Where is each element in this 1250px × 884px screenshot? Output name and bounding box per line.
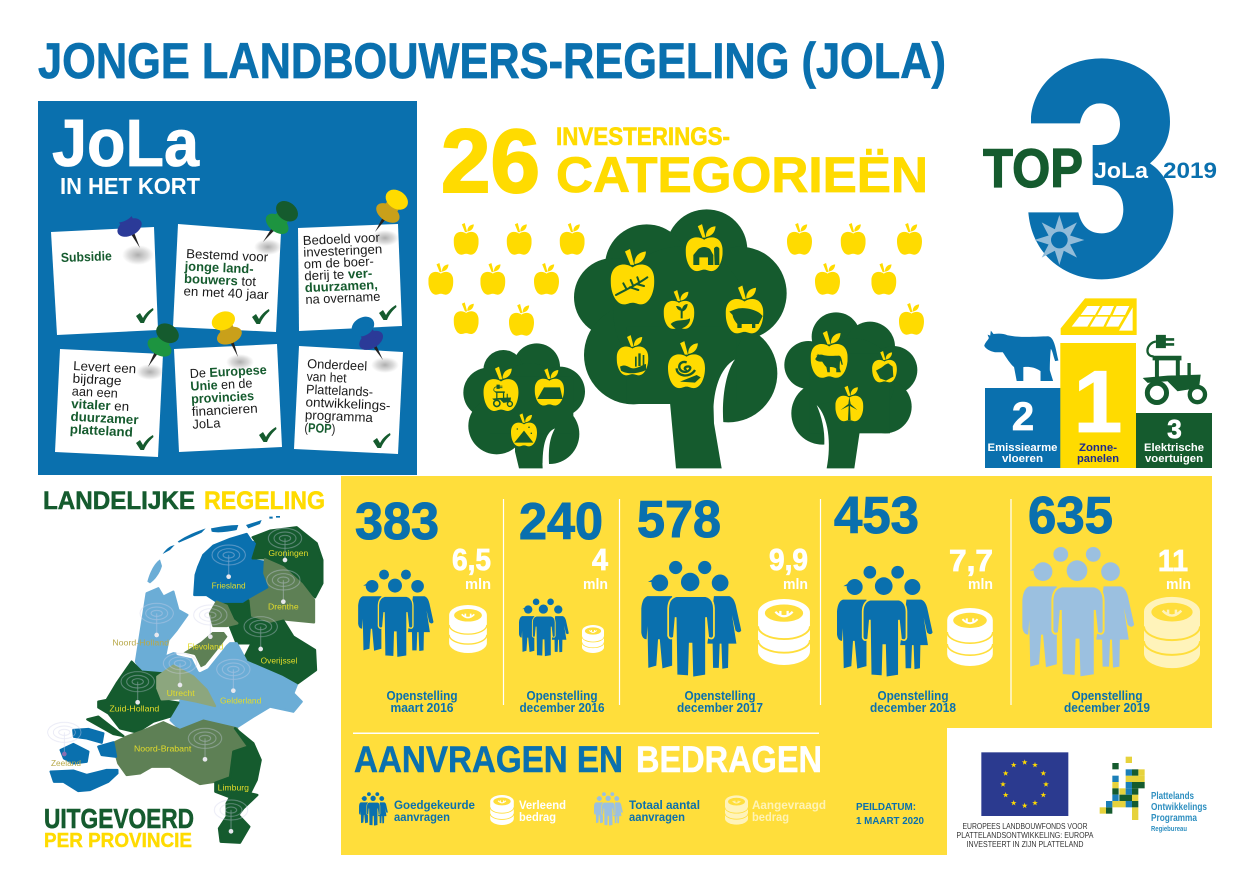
heading: aanvragen en bedragen <box>354 739 822 780</box>
heading: aanvragen en bedragen: BEDRAGEN <box>636 739 822 780</box>
icon: rose and carrot <box>677 362 701 383</box>
Noordoostpolder <box>210 602 237 626</box>
province labels: Overijssel <box>261 656 297 666</box>
note: vitaler platteland: aan een <box>72 383 118 401</box>
icon: pig <box>729 308 763 328</box>
large numeral 3 <box>1028 58 1173 279</box>
top 3 graphic <box>983 58 1217 468</box>
note: verduurzamen: duurzamen, <box>305 277 378 295</box>
icon: sun <box>1034 215 1084 265</box>
stat: december 2017 <box>637 491 810 715</box>
note: Europese Unie: Unie en de <box>190 375 253 394</box>
icon: barn <box>693 247 719 265</box>
note: vitaler platteland: Levert een <box>73 358 137 376</box>
Wadden islands <box>163 516 280 554</box>
legend: goedgekeurde aanvragen: aanvragen <box>394 812 450 824</box>
small left tree <box>463 343 585 468</box>
stat: december 2018 <box>834 487 993 715</box>
loose yellow apples <box>428 223 924 336</box>
icon: chicken <box>876 363 893 381</box>
stat: maart 2016: 6,5 <box>452 542 491 577</box>
label: JoLa: JoLa <box>1094 158 1149 183</box>
note: vitaler platteland <box>55 349 164 457</box>
podium step 1: panelen <box>1077 453 1119 465</box>
legend: goedgekeurde aanvragen <box>359 792 475 826</box>
Utrecht <box>157 666 215 706</box>
stat: december 2017: 578 <box>637 491 721 549</box>
heading: 26 investeringscategorieen <box>441 112 928 212</box>
legend: verleend bedrag <box>490 795 566 825</box>
stat: december 2018: mln <box>968 576 993 593</box>
Flevoland <box>178 630 230 670</box>
note: verduurzamen <box>298 224 402 331</box>
province labels: Limburg <box>218 783 249 793</box>
stat: december 2016 <box>519 493 609 715</box>
note: POP: Plattelands- <box>306 382 373 399</box>
logo: Plattelands Ontwikkelings Programma: Plattelands <box>1151 790 1194 802</box>
label: 2019: 2019 <box>1163 158 1217 183</box>
heading: JoLa: JoLa <box>52 106 200 181</box>
podium <box>984 298 1212 468</box>
stat: maart 2016: mln <box>465 576 491 593</box>
heading: 26 investeringscategorieen: INVESTERINGS- <box>556 123 730 151</box>
legend: totaal aantal aanvragen: aanvragen <box>629 812 685 824</box>
stat: december 2017: december 2017 <box>677 701 763 715</box>
illustration: apples and trees <box>428 209 924 470</box>
note: POP <box>294 346 403 454</box>
note: Europese Unie: De Europese <box>189 362 267 381</box>
large tree <box>574 209 787 468</box>
note: subsidie: Subsidie <box>61 248 112 265</box>
province labels: Groningen <box>268 548 309 558</box>
province labels: Zuid-Holland <box>109 703 160 713</box>
panel: JoLa in het kort <box>38 101 417 475</box>
icon: wheat <box>616 277 647 295</box>
stat: december 2019: 635 <box>1028 487 1113 545</box>
province labels: Flevoland <box>187 641 223 651</box>
panel: aanvragen en bedragen <box>341 476 1212 855</box>
title: JONGE LANDBOUWERS-REGELING (JOLA) <box>38 33 946 89</box>
stat: december 2018: 7,7 <box>949 543 993 578</box>
note: POP: (POP) <box>304 420 336 436</box>
note: verduurzamen: om de boer- <box>304 254 374 272</box>
heading: 26 investeringscategorieen: 26 <box>441 112 540 212</box>
heading: aanvragen en bedragen: AANVRAGEN EN <box>354 739 623 780</box>
stat: december 2019: december 2019 <box>1064 701 1150 715</box>
stat: december 2019: 11 <box>1158 543 1188 578</box>
province labels: Friesland <box>212 581 246 591</box>
stat: december 2019 <box>1022 487 1200 715</box>
stat: maart 2016: 383 <box>355 493 439 551</box>
heading: uitgevoerd per provincie: PER PROVINCIE <box>44 830 192 852</box>
stat: december 2018: Openstelling <box>878 689 948 703</box>
stat: december 2018: december 2018 <box>870 701 956 715</box>
note: POP: programma <box>305 407 374 425</box>
note: Europese Unie: provincies <box>191 388 254 406</box>
province labels: Gelderland <box>220 695 262 705</box>
logo: EU flag and caption <box>956 752 1094 849</box>
icon: wind turbine <box>841 397 857 420</box>
note: jonge landbouwers: jonge land- <box>183 258 254 276</box>
right tree <box>784 312 917 470</box>
Noord-Brabant <box>113 721 247 784</box>
icon: green pin 2 <box>137 319 183 374</box>
icon: tractor <box>492 385 512 407</box>
legend <box>359 792 826 826</box>
icon: cow on podium <box>984 331 1058 381</box>
stat: december 2016: 4 <box>592 542 609 577</box>
stat: december 2018: 453 <box>834 487 919 545</box>
legend: aangevraagd bedrag: bedrag <box>752 812 789 824</box>
icon: cow <box>815 354 843 372</box>
podium step 2: 2 <box>1012 395 1034 439</box>
ripples and markers <box>48 528 302 832</box>
heading: landelijke regeling <box>43 487 325 515</box>
note: vitaler platteland: vitaler en <box>71 396 130 414</box>
heading: landelijke regeling: LANDELIJKE <box>43 487 195 515</box>
note: Europese Unie: JoLa <box>192 415 222 432</box>
Texel <box>147 559 162 583</box>
note: jonge landbouwers <box>173 224 282 332</box>
legend: verleend bedrag: Verleend <box>519 800 566 812</box>
logo: Plattelands Ontwikkelings Programma: Programma <box>1151 812 1197 824</box>
stat: december 2019: mln <box>1166 576 1191 593</box>
podium step 3: 3 <box>1167 414 1182 444</box>
note: jonge landbouwers: bouwers tot <box>184 271 257 289</box>
podium step 3 <box>1136 413 1212 468</box>
podium step 1: Zonne- <box>1079 442 1117 454</box>
stat: december 2017: mln <box>783 576 808 593</box>
note: vitaler platteland: bijdrage <box>72 371 122 388</box>
legend: goedgekeurde aanvragen: Goedgekeurde <box>394 800 475 812</box>
Zeeland <box>51 729 117 791</box>
stat: december 2019: Openstelling <box>1072 689 1142 703</box>
stat: maart 2016: maart 2016 <box>390 701 454 715</box>
Gelderland <box>171 643 302 729</box>
stat: december 2016: 240 <box>519 493 603 551</box>
peildatum <box>856 802 924 827</box>
icon: yellow pin 1 <box>364 185 413 239</box>
logo: Plattelands Ontwikkelings Programma <box>1100 757 1207 833</box>
icon: green pin 1 <box>253 196 303 250</box>
stat: december 2016: mln <box>583 576 608 593</box>
peildatum: 1 MAART 2020 <box>856 816 924 827</box>
podium step 1 <box>1060 343 1136 468</box>
Friesland <box>194 534 269 603</box>
label: TOP: TOP <box>983 137 1083 199</box>
stat: maart 2016: Openstelling <box>386 689 458 703</box>
heading: uitgevoerd per provincie: UITGEVOERD <box>44 803 194 834</box>
icon: solar panel on podium <box>1061 298 1137 335</box>
note: POP: van het <box>306 369 347 386</box>
logo: EU flag and caption: INVESTEERT IN ZIJN PLATTELAND <box>966 840 1084 849</box>
province labels: Utrecht <box>167 688 195 698</box>
note: jonge landbouwers: Bestemd voor <box>186 246 269 265</box>
note: verduurzamen: na overname <box>305 289 381 307</box>
legend: aangevraagd bedrag: Aangevraagd <box>752 800 826 812</box>
podium step 2: Emissiearme <box>988 442 1058 454</box>
province labels: Noord-Brabant <box>134 743 192 753</box>
Drenthe <box>249 559 314 623</box>
logo: Plattelands Ontwikkelings Programma: Regiebureau <box>1151 824 1187 833</box>
Noord-Holland <box>136 588 200 677</box>
icon: blue pin 1 <box>108 202 152 254</box>
icon: hand with sprout <box>671 304 690 329</box>
province labels: Zeeland <box>51 758 81 768</box>
icon: yellow pin 2 <box>208 308 250 362</box>
heading: 26 investeringscategorieen: CATEGORIEËN <box>556 147 928 203</box>
stat: december 2016: december 2016 <box>520 701 605 715</box>
peildatum: PEILDATUM: <box>856 802 916 813</box>
icon: soil heap <box>514 427 533 443</box>
Groningen <box>253 527 322 597</box>
subheading: in het kort: IN HET KORT <box>60 173 200 199</box>
legend: totaal aantal aanvragen <box>594 792 700 826</box>
podium step 2 <box>985 388 1061 468</box>
note: vitaler platteland: duurzamer <box>70 409 139 427</box>
podium step 3: voertuigen <box>1145 453 1203 465</box>
note: POP: Onderdeel <box>307 356 368 374</box>
note: Europese Unie: financieren <box>191 401 258 419</box>
logo: Plattelands Ontwikkelings Programma: Ontwikkelings <box>1151 801 1207 813</box>
stat: maart 2016 <box>355 493 491 715</box>
podium step 1: 1 <box>1074 352 1122 451</box>
note: POP: ontwikkelings- <box>305 394 391 413</box>
podium step 2: vloeren <box>1002 453 1043 465</box>
province labels: Noord-Holland <box>112 638 169 648</box>
note: subsidie <box>51 227 158 335</box>
icon: electric tractor <box>1143 335 1205 403</box>
province labels: Drenthe <box>268 601 299 611</box>
legend: aangevraagd bedrag <box>725 795 826 825</box>
podium step 3: Elektrische <box>1144 442 1204 454</box>
Limburg <box>215 728 261 843</box>
legend: totaal aantal aanvragen: Totaal aantal <box>629 800 700 812</box>
Zuid-Holland <box>87 662 178 736</box>
logo: EU flag and caption: PLATTELANDSONTWIKKELING: EUROPA <box>956 831 1094 840</box>
note: verduurzamen: investeringen <box>303 241 383 260</box>
note: vitaler platteland: platteland <box>70 421 133 440</box>
stat: december 2017: 9,9 <box>769 542 808 577</box>
legend: verleend bedrag: bedrag <box>519 812 556 824</box>
heading: uitgevoerd per provincie <box>44 803 194 852</box>
stat: december 2017: Openstelling <box>684 689 756 703</box>
icon: reed and water <box>620 353 646 373</box>
note: verduurzamen: Bedoeld voor <box>302 230 381 248</box>
Overijssel <box>222 601 316 684</box>
icon: solar panel <box>537 387 563 399</box>
map: Netherlands provinces <box>48 516 322 843</box>
note: jonge landbouwers: en met 40 jaar <box>183 283 269 302</box>
logo: EU flag and caption: EUROPEES LANDBOUWFONDS VOOR <box>962 822 1088 831</box>
icon: blue pin 2 <box>347 312 394 367</box>
province labels <box>51 548 309 793</box>
heading: landelijke regeling: REGELING <box>204 487 325 515</box>
stat: december 2016: Openstelling <box>526 689 598 703</box>
note: verduurzamen: derij te ver- <box>304 265 373 283</box>
note: Europese Unie <box>174 344 282 452</box>
